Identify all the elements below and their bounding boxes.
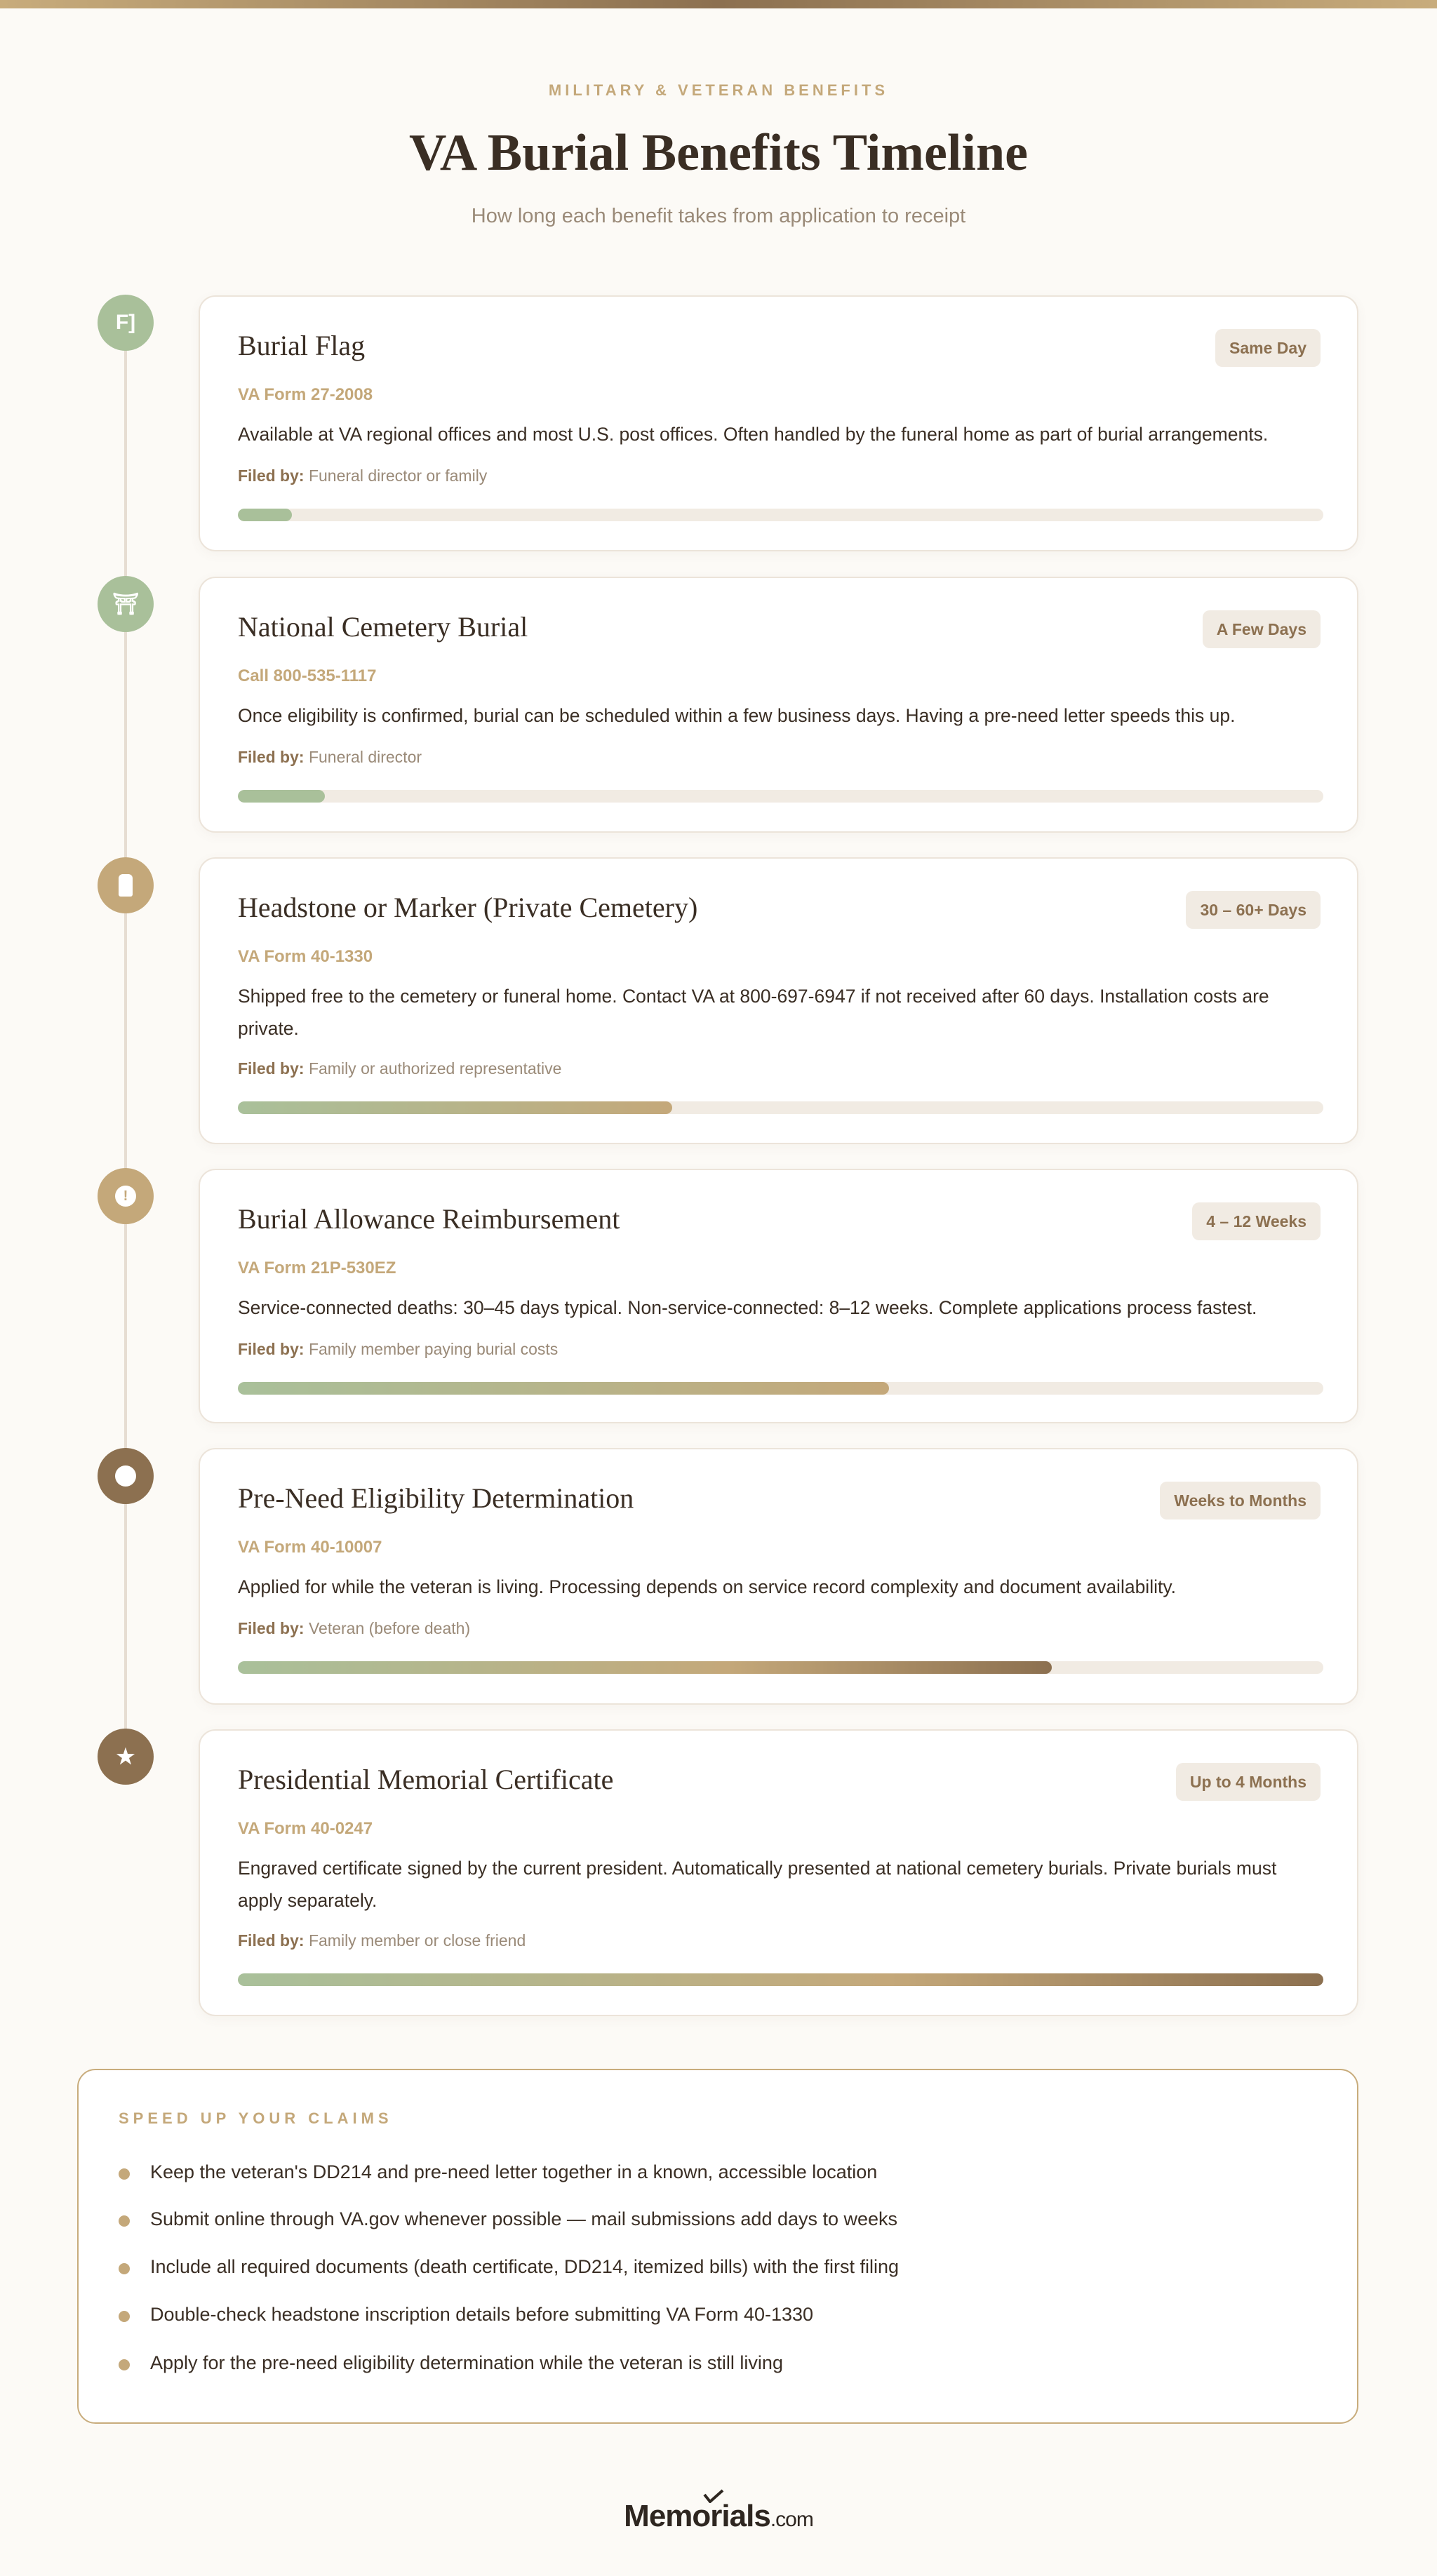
panel: pre-need: Weeks to Months [1174, 1491, 1306, 1510]
panel: headstone [199, 857, 1358, 1144]
logo: Memorials.com [624, 2499, 813, 2533]
panel: presidential certificate: Filed by: Family member or close friend [238, 1931, 526, 1950]
panel: burial flag: Filed by: Funeral director or family [238, 467, 487, 485]
panel: headstone: Filed by: Family or authorized representative [238, 1059, 561, 1078]
top bar [0, 0, 1437, 8]
panel: pre-need: VA Form 40-10007 [238, 1538, 382, 1557]
timeline line [124, 323, 127, 1761]
panel: burial flag: Available at VA regional offices and most U.S. post offices. Often handled by the funeral home as part of burial arrangements. [238, 424, 1268, 445]
panel: burial allowance: Filed by: Family member paying burial costs [238, 1340, 558, 1358]
panel: pre-need: Filed by: Veteran (before death) [238, 1619, 470, 1637]
panel: burial flag: Burial Flag [238, 330, 365, 361]
panel: presidential certificate: Presidential Memorial Certificate [238, 1764, 613, 1795]
panel: burial allowance [199, 1169, 1358, 1423]
eyebrow: MILITARY & VETERAN BENEFITS [549, 81, 888, 99]
panel: national cemetery: Once eligibility is confirmed, burial can be scheduled within a few business days. Having a pre-need letter speeds this up. [238, 705, 1235, 726]
icon: circle [98, 1448, 154, 1504]
icon: cemetery [98, 576, 154, 632]
panel: burial flag [199, 295, 1358, 551]
icon: flag: F] [116, 311, 135, 334]
panel: pre-need [199, 1448, 1358, 1705]
panel: national cemetery: A Few Days [1217, 620, 1306, 638]
icon: star [98, 1729, 154, 1785]
panel: burial flag: VA Form 27-2008 [238, 385, 373, 404]
panel: tips [77, 2069, 1358, 2424]
panel: tips: Include all required documents (death certificate, DD214, itemized bills) with the first filing [150, 2256, 899, 2277]
icon: flag [98, 295, 154, 351]
panel: pre-need: Applied for while the veteran is living. Processing depends on service record complexity and document availability. [238, 1576, 1176, 1597]
icon: alert [98, 1168, 154, 1224]
panel: headstone: Headstone or Marker (Private Cemetery) [238, 892, 697, 923]
icon: cemetery: ⛩ [112, 592, 139, 616]
panel: burial allowance: VA Form 21P-530EZ [238, 1259, 396, 1277]
panel: tips: SPEED UP YOUR CLAIMS [119, 2109, 393, 2127]
title: VA Burial Benefits Timeline [409, 124, 1028, 182]
panel: national cemetery [199, 577, 1358, 833]
panel: tips: Keep the veteran's DD214 and pre-need letter together in a known, accessible location [150, 2161, 877, 2182]
panel: tips: Apply for the pre-need eligibility determination while the veteran is still living [150, 2352, 783, 2373]
panel: burial allowance: Burial Allowance Reimbursement [238, 1203, 620, 1235]
panel: presidential certificate [199, 1729, 1358, 2016]
icon: alert: ! [123, 1188, 128, 1204]
panel: pre-need: Pre-Need Eligibility Determination [238, 1482, 634, 1514]
panel: headstone: VA Form 40-1330 [238, 947, 373, 966]
panel: national cemetery: Filed by: Funeral director [238, 748, 422, 766]
panel: burial allowance: Service-connected deaths: 30–45 days typical. Non-service-connected: 8–12 weeks. Complete applications process fastest. [238, 1297, 1257, 1318]
panel: burial allowance: 4 – 12 Weeks [1206, 1212, 1306, 1230]
panel: national cemetery: National Cemetery Burial [238, 611, 528, 643]
panel: headstone: Shipped free to the cemetery or funeral home. Contact VA at 800-697-6947 if not received after 60 days. Installation costs are private. [238, 986, 1269, 1039]
panel: national cemetery: Call 800-535-1117 [238, 666, 376, 685]
panel: presidential certificate: Engraved certificate signed by the current president. Automatically presented at national cemetery burials. Private burials must apply separately. [238, 1858, 1276, 1911]
panel: tips: Submit online through VA.gov whenever possible — mail submissions add days to weeks [150, 2208, 897, 2229]
icon: headstone [98, 857, 154, 913]
icon: star: ★ [116, 1745, 135, 1768]
panel: headstone: 30 – 60+ Days [1200, 901, 1306, 919]
panel: presidential certificate: Up to 4 Months [1190, 1772, 1306, 1790]
subtitle: How long each benefit takes from application to receipt [472, 205, 965, 227]
panel: tips: Double-check headstone inscription details before submitting VA Form 40-1330 [150, 2304, 813, 2325]
panel: burial flag: Same Day [1229, 338, 1306, 356]
panel: presidential certificate: VA Form 40-0247 [238, 1819, 373, 1838]
